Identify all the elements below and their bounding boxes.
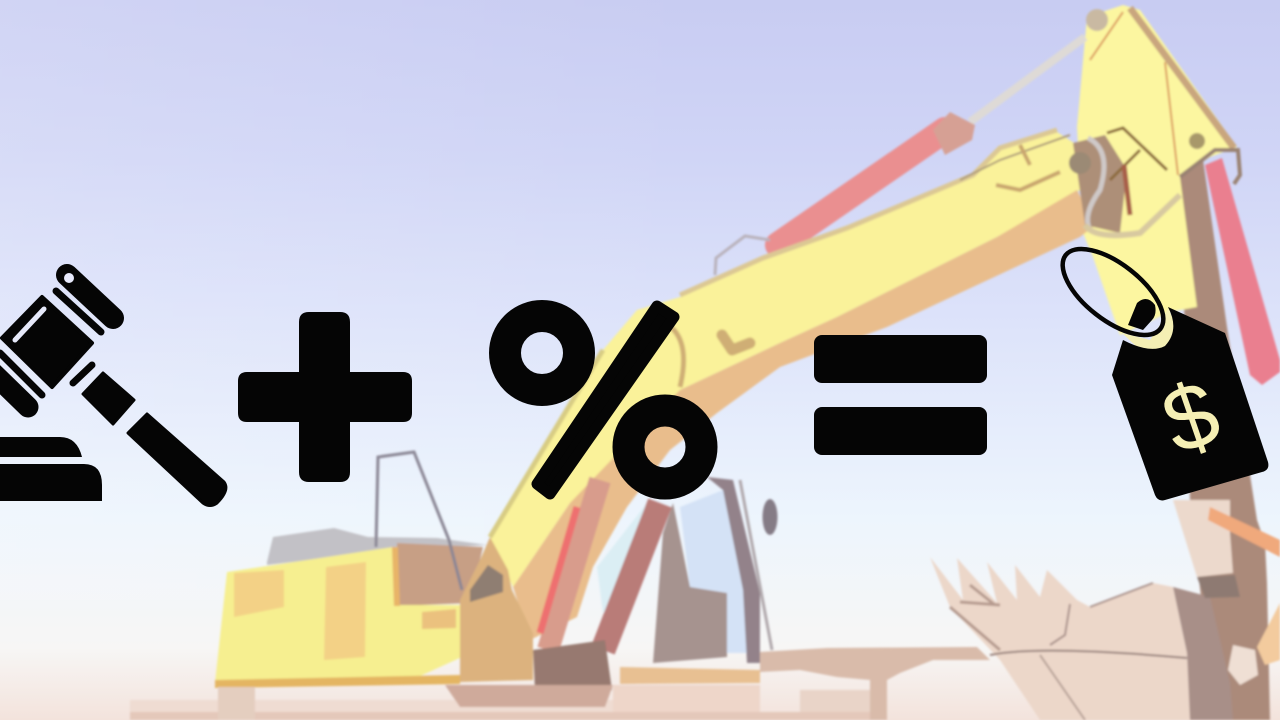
gavel head highlight [15, 309, 44, 340]
hydraulic cylinder: upper with rod [715, 37, 1085, 275]
percent lower ring [628, 410, 702, 484]
gavel sound block [0, 437, 102, 501]
tag hole [1128, 299, 1156, 330]
hydraulic cylinder: right [1205, 158, 1280, 385]
icon: plus sign [238, 312, 412, 482]
gavel thin bands [0, 291, 101, 395]
tag string loop [1048, 233, 1178, 351]
gavel collar [83, 373, 134, 424]
bucket [930, 557, 1240, 720]
gavel head [2, 297, 92, 387]
tag body [1112, 307, 1268, 500]
platform behind bucket [130, 647, 990, 720]
boom base pivot [460, 537, 533, 682]
stick yellow section [1077, 5, 1240, 335]
tag cream eyelet [1122, 308, 1178, 350]
percent slash [537, 306, 674, 494]
icon: percent sign [505, 306, 702, 494]
tag dollar sign: $ [1150, 361, 1232, 474]
main boom [490, 130, 1095, 640]
gavel top cap [67, 275, 113, 318]
stick lower column [1173, 160, 1280, 720]
crawler track [445, 685, 613, 707]
cap highlight [64, 273, 74, 283]
gavel bottom cap [0, 372, 28, 407]
icon: gavel [0, 273, 226, 506]
icon: equals sign [814, 335, 987, 455]
boom head hoses [1069, 128, 1180, 235]
machine body [215, 452, 487, 720]
icon: price tag [1048, 233, 1268, 500]
gavel handle [128, 414, 226, 506]
hydraulic cylinders: lower [533, 480, 660, 690]
operator cab [597, 477, 778, 712]
percent upper ring [505, 316, 579, 390]
